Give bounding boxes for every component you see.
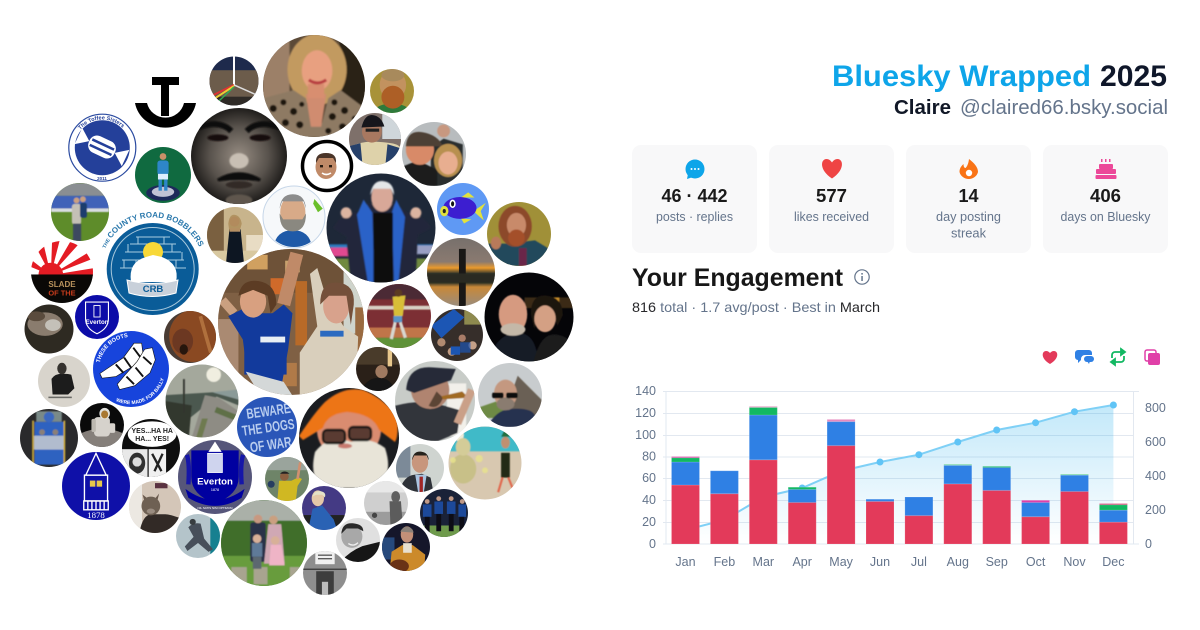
icon: black T and U logo [135, 77, 196, 128]
avatar: comic panel: YES...HA HA [131, 428, 173, 435]
icon: replies bubbles [1075, 350, 1094, 364]
avatar: subbuteo figure [135, 147, 191, 203]
avatar: team in blue tracksuits [420, 489, 468, 538]
avatar: man in sunglasses by pyramid [478, 363, 542, 427]
badge: County Road Bobblers [102, 212, 204, 315]
right axis labels: 800 [1145, 401, 1166, 415]
avatar: stained glass window [20, 409, 78, 467]
avatar: man in cap [349, 113, 401, 165]
avatar: fan in yellow shirt [265, 457, 309, 501]
avatar: couple at stadium [51, 183, 109, 241]
bar: Apr [788, 487, 816, 544]
month labels: Aug [947, 555, 969, 569]
left axis labels: 0 [649, 537, 656, 551]
panel: likes received [769, 145, 894, 253]
icon: birthday cake [1096, 159, 1116, 179]
right axis labels: 200 [1145, 503, 1166, 517]
avatar: man in orange hat and white beard [299, 388, 399, 488]
avatar: Beware the Dogs of War banner: OF WAR [249, 435, 293, 456]
left axis labels: 60 [642, 471, 656, 485]
avatar: graffiti footballer [176, 514, 221, 558]
avatar: black and white smiling man [336, 518, 380, 562]
avatar: celebrating manager small [302, 486, 346, 531]
avatar: man with guitar [382, 523, 430, 573]
panel: day posting streak: day posting [936, 209, 1001, 224]
month labels: Jun [870, 555, 890, 569]
avatar: blue Everton tower: 1878 [87, 510, 105, 520]
user name and handle: Claire [894, 97, 951, 119]
icon: info [855, 270, 869, 284]
cumulative line [686, 405, 1113, 530]
bar: Dec [1099, 504, 1127, 544]
avatar: dim-lit man [356, 347, 400, 391]
bar: Sep [983, 466, 1011, 544]
panel: likes received: likes received [794, 209, 869, 224]
left axis labels [635, 384, 656, 551]
avatar: These Boots sticker [93, 331, 169, 407]
avatar: Beware the Dogs of War banner: BEWARE [245, 401, 292, 423]
avatar: man in suit [396, 444, 444, 492]
badge: County Road Bobblers: CRB [143, 284, 163, 295]
avatar: small Everton crest [75, 295, 119, 339]
avatar: These Boots sticker: WERE MADE FOR BALLY [116, 378, 164, 404]
panel: likes received: 577 [816, 186, 847, 206]
avatar: brown dog [164, 310, 217, 363]
avatar: sandy snowman and elf [448, 426, 522, 500]
avatar: family portrait [221, 500, 307, 590]
month labels: Mar [753, 555, 774, 569]
engagement summary: 816 total · 1.7 avg/post · Best in March [632, 299, 880, 315]
month labels: Oct [1026, 555, 1046, 569]
month labels: Apr [792, 555, 812, 569]
panel: day posting streak: 14 [958, 186, 978, 206]
avatar: blue Everton tower [62, 452, 130, 520]
avatar: Everton crest on grey: Everton [197, 476, 233, 487]
bar: Aug [944, 464, 972, 544]
month labels: Dec [1102, 555, 1125, 569]
bar: Oct [1022, 500, 1050, 544]
avatar: blue fish [437, 183, 489, 235]
bar: Jul [905, 497, 933, 544]
avatar: stadium rainbow [210, 56, 258, 106]
user name and handle: @claired66.bsky.social [960, 97, 1168, 119]
bar: Jun [866, 499, 894, 544]
avatar: canal path at dusk [166, 364, 238, 438]
avatar: bald couple at night [484, 272, 574, 362]
month labels: Nov [1063, 555, 1086, 569]
title: 2025 [1100, 60, 1167, 93]
avatar: illustrated bearded man [487, 202, 551, 266]
avatar: grey doorway building [303, 551, 347, 595]
avatar: couple selfie [402, 122, 466, 186]
month labels: Sep [986, 555, 1008, 569]
avatar: woman in dark dress [207, 207, 263, 265]
avatar: grey-bearded memoji [263, 186, 325, 248]
panel: day posting streak [906, 145, 1031, 253]
panel: day posting streak: streak [951, 226, 986, 240]
avatar: comic panel [122, 419, 180, 478]
icon: speech bubble [686, 160, 704, 179]
month labels [675, 555, 1125, 569]
left axis labels: 80 [642, 450, 656, 464]
title: Bluesky Wrapped [832, 60, 1091, 93]
legend icons [1043, 349, 1160, 365]
chart: monthly engagement bars with cumulative line [635, 384, 1166, 569]
month labels: May [829, 555, 854, 569]
bar: Mar [749, 406, 777, 544]
avatar: Beware the Dogs of War banner [237, 397, 298, 457]
avatar: main couple with footballer cutout [218, 249, 367, 398]
panel: days on Bluesky: 406 [1090, 186, 1121, 206]
panel: posts and replies: posts · replies [656, 209, 733, 224]
avatar: Everton crest on grey: NIL SATIS NISI OPTIMUM [198, 506, 233, 510]
avatar: astronaut [80, 403, 124, 447]
icon: heart [822, 159, 842, 178]
month labels: Feb [714, 555, 735, 569]
avatar: Beware the Dogs of War banner: THE DOGS [241, 417, 296, 440]
badge: County Road Bobblers: THE COUNTY ROAD BOBBLERS [102, 212, 204, 248]
avatar: Slade of the Fire: OF THE [48, 289, 76, 298]
avatar: Toffee Sisters badge [68, 114, 136, 182]
bar: May [827, 419, 855, 544]
avatar: black and white man on beach [364, 481, 408, 527]
left axis labels: 120 [635, 406, 656, 420]
cumulative area [686, 405, 1113, 544]
avatar: football manager celebrating [326, 174, 436, 285]
line points [799, 402, 1117, 492]
avatar: man drinking beer [395, 361, 475, 441]
icon: reposts arrows [1111, 349, 1125, 365]
avatar: comic panel: HA... YES! [135, 436, 169, 443]
avatar: memoji in black ring [302, 142, 352, 190]
month labels: Jul [911, 555, 927, 569]
avatar: dark animal photo [24, 304, 74, 354]
avatar: Everton crest on grey: 1878 [211, 488, 219, 492]
heading: Your Engagement: Your Engagement [632, 264, 844, 292]
bar: Jan [672, 457, 700, 544]
avatar: tabby cat [129, 481, 181, 533]
avatar: Toffee Sisters badge: 2011 [97, 176, 107, 181]
right axis labels [1145, 401, 1166, 551]
avatar bubble cluster [20, 35, 574, 595]
panel: posts and replies: 46 · 442 [662, 186, 728, 206]
right axis labels: 0 [1145, 537, 1152, 551]
icon: likes heart [1043, 351, 1057, 364]
panel: days on Bluesky [1043, 145, 1168, 253]
stacked bars [672, 406, 1127, 544]
avatar: These Boots sticker: THESE BOOTS [96, 333, 128, 362]
avatar: blonde woman [263, 34, 370, 137]
avatar: small Everton crest: Everton [86, 319, 109, 326]
icon: flame [960, 159, 978, 179]
right axis labels: 600 [1145, 435, 1166, 449]
avatar: sunset landmark [427, 238, 495, 306]
avatar: Everton crest on grey [178, 440, 252, 514]
avatar: Toffee Sisters badge: The Toffee Sisters [78, 116, 124, 129]
avatar: stadium footballer in yellow [367, 284, 431, 351]
left axis labels: 140 [635, 384, 656, 398]
panel: days on Bluesky: days on Bluesky [1060, 209, 1151, 224]
bar: Nov [1060, 474, 1088, 544]
icon: quotes squares [1145, 350, 1160, 365]
left axis labels: 100 [635, 428, 656, 442]
left axis labels: 20 [642, 515, 656, 529]
left axis labels: 40 [642, 493, 656, 507]
gridlines [663, 391, 1139, 544]
month labels: Jan [675, 555, 696, 569]
avatar: Slade of the Fire [31, 241, 93, 305]
avatar: close-up face [191, 108, 287, 206]
avatar: mural man in black [38, 355, 90, 407]
right axis labels: 400 [1145, 469, 1166, 483]
avatar: bearded man on green [370, 69, 414, 113]
avatar: fans with blue flag [431, 309, 483, 361]
avatar: Slade of the Fire: SLADE [48, 280, 76, 289]
bar: Feb [710, 471, 738, 544]
panel: posts and replies [632, 145, 757, 253]
